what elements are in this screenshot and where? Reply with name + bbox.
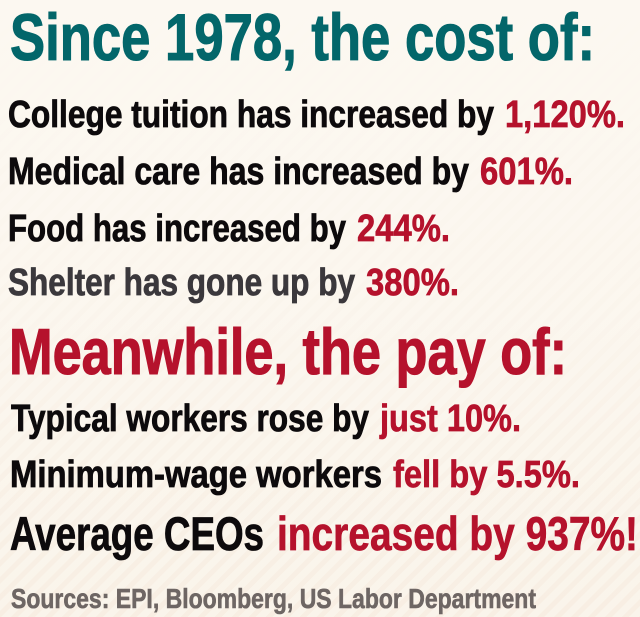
line: shelter: 380%. [366,262,459,304]
block: pay changes [10,398,638,560]
line: medical care: Medical care has increased by [8,151,469,193]
block: cost increases [8,94,625,304]
line: college tuition: College tuition has increased by [8,94,494,136]
line: minimum-wage workers: fell by 5.5%. [393,454,580,496]
line: minimum-wage workers: Minimum-wage workers [10,454,382,496]
sources footnote: Sources: EPI, Bloomberg, US Labor Department [11,583,536,614]
line: food: 244%. [357,208,450,250]
line: food: Food has increased by [8,208,346,250]
line: medical care: 601%. [480,151,573,193]
line: typical workers: Typical workers rose by [11,398,369,440]
line: average CEOs: Average CEOs [10,507,264,560]
line: typical workers: just 10%. [379,398,521,440]
line: shelter: Shelter has gone up by [8,262,355,304]
line: average CEOs [10,507,638,560]
